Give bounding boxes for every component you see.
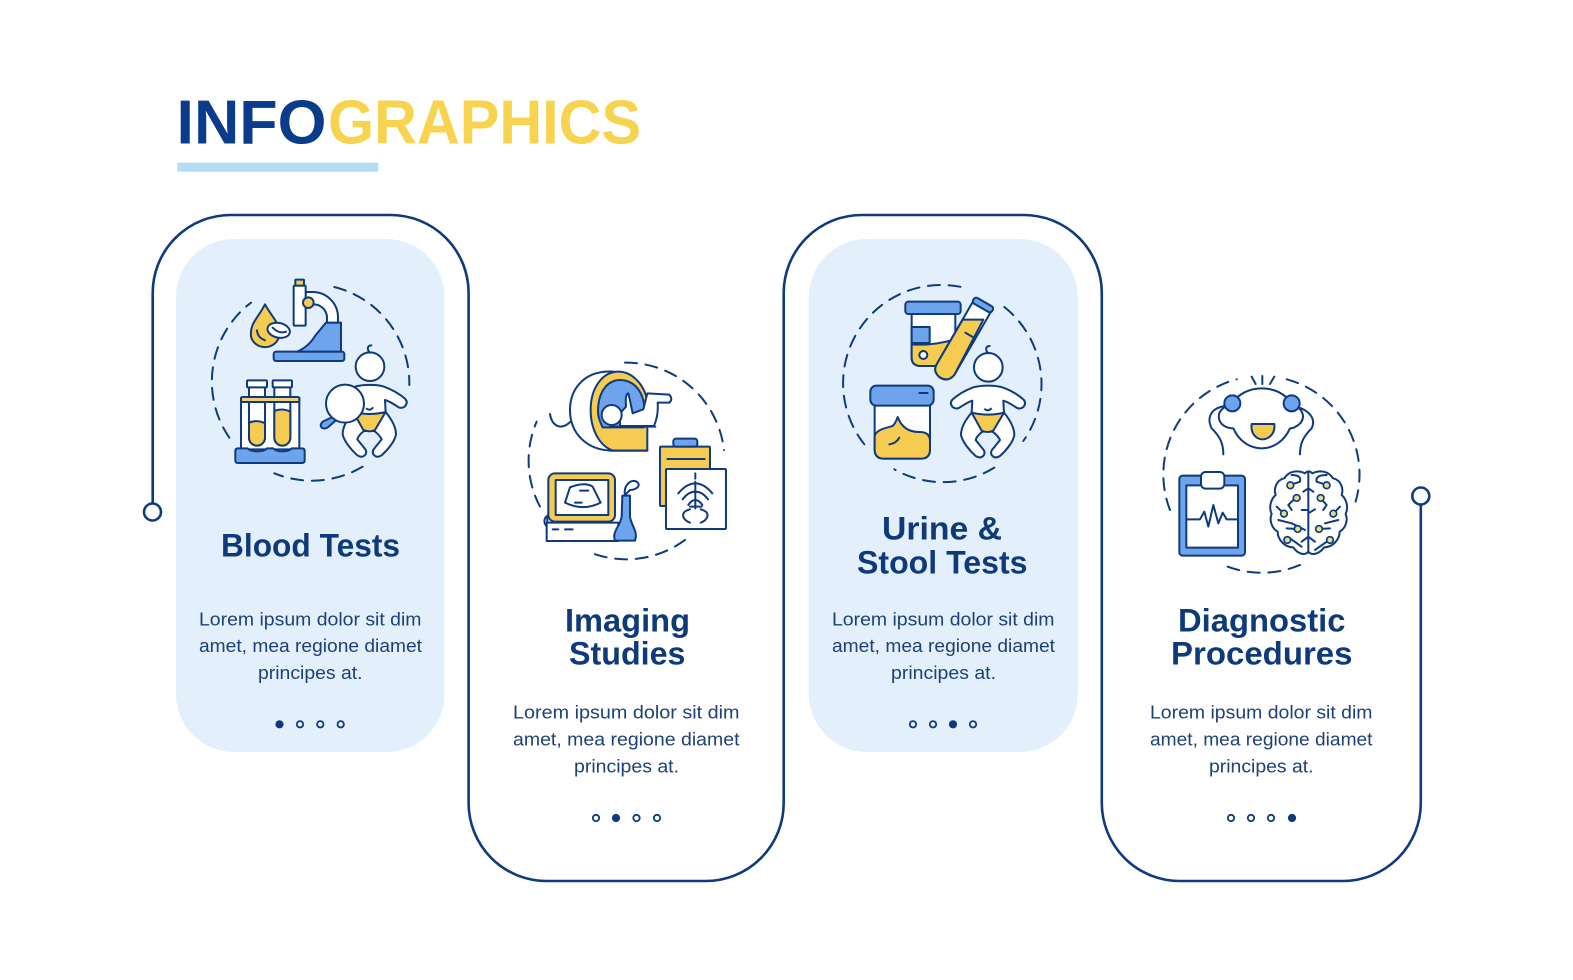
description: blood tests: Lorem ipsum dolor sit dim (199, 608, 422, 630)
description: urine and stool tests (832, 608, 1055, 683)
icon: diagnostic procedures (1163, 376, 1360, 573)
panel: imaging studies (513, 363, 740, 821)
heading: diagnostic procedures (1171, 602, 1352, 672)
description: diagnostic procedures (1150, 702, 1372, 776)
panel background: blood tests (176, 239, 444, 752)
heading: urine and stool tests (857, 510, 1028, 580)
winding outline connecting panels (144, 215, 1429, 881)
heading: urine and stool tests: Stool Tests (857, 544, 1028, 580)
heading: diagnostic procedures: Diagnostic (1178, 602, 1346, 638)
title: INFO (176, 88, 326, 158)
description: urine and stool tests: principes at. (891, 662, 996, 683)
description: diagnostic procedures: Lorem ipsum dolor sit dim (1150, 702, 1372, 722)
icon: urine and stool tests (843, 285, 1042, 482)
heading: blood tests: Blood Tests (221, 528, 400, 564)
title: GRAPHICS (328, 88, 641, 158)
description: imaging studies: amet, mea regione diamet (513, 728, 740, 750)
icon: blood tests (212, 280, 409, 481)
description: blood tests: principes at. (258, 662, 362, 683)
icon: imaging studies (529, 363, 726, 559)
heading: urine and stool tests: Urine & (882, 510, 1002, 546)
step indicator: 1 of 4 (276, 721, 344, 728)
title underline (177, 163, 378, 172)
description: urine and stool tests: Lorem ipsum dolor sit dim (832, 608, 1054, 630)
description: diagnostic procedures: principes at. (1209, 756, 1314, 776)
panel background: urine and stool tests (809, 239, 1078, 752)
heading: imaging studies: Imaging (565, 602, 690, 638)
description: urine and stool tests: amet, mea regione diamet (832, 635, 1055, 656)
step indicator: 3 of 4 (910, 721, 976, 728)
title (176, 88, 641, 158)
step indicator: 2 of 4 (593, 815, 660, 821)
panel: diagnostic procedures (1150, 376, 1372, 821)
heading: imaging studies: Studies (569, 636, 686, 672)
panel: blood tests (199, 280, 422, 728)
description: diagnostic procedures: amet, mea regione diamet (1150, 728, 1372, 750)
description: imaging studies: Lorem ipsum dolor sit dim (513, 702, 740, 722)
step indicator: 4 of 4 (1228, 815, 1295, 821)
heading: imaging studies (565, 602, 690, 672)
description: imaging studies (513, 702, 740, 776)
description: blood tests: amet, mea regione diamet (199, 635, 422, 656)
panel: urine and stool tests (832, 285, 1055, 728)
description: blood tests (199, 608, 422, 683)
heading: diagnostic procedures: Procedures (1171, 636, 1352, 672)
description: imaging studies: principes at. (574, 756, 679, 776)
